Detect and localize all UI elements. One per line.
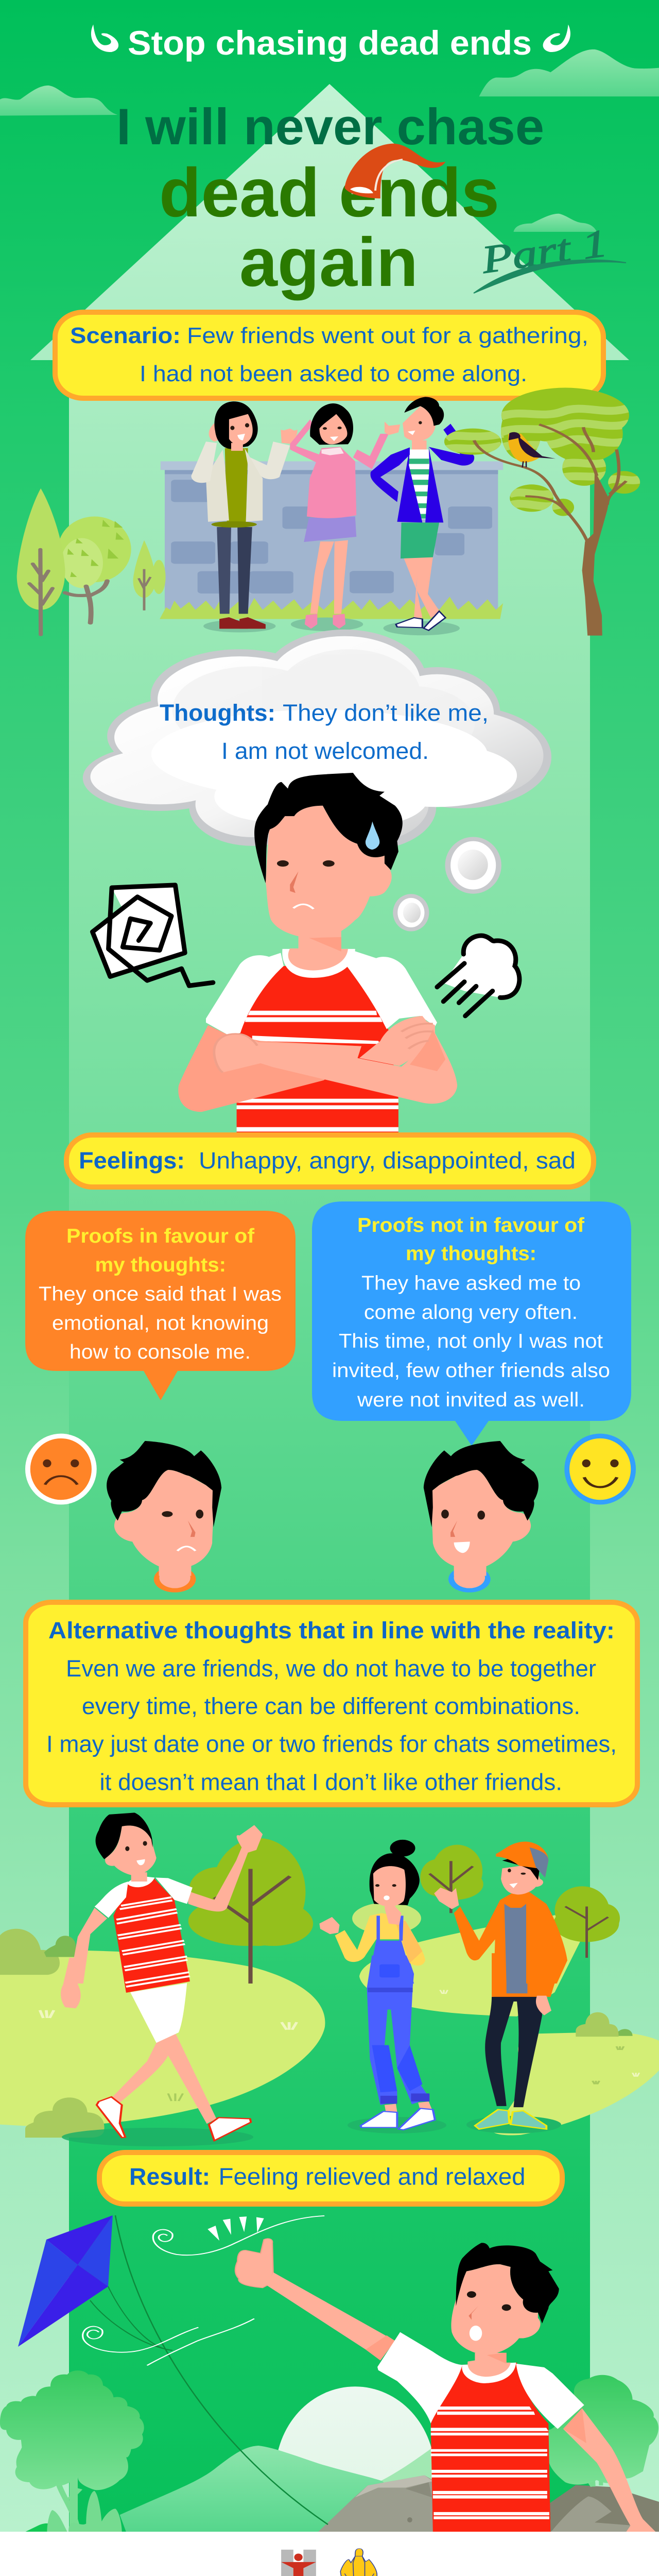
part label [474,222,626,293]
illustration: happy boy with thumb up [235,2239,655,2532]
panel: scenario: Few friends went out for a gathering, [187,323,588,348]
icon: red arrow over the word ends [344,144,445,198]
panel: proofs in favour: emotional, not knowing [52,1312,269,1334]
mountains behind title [0,49,659,232]
hand: thumbs up [235,2239,273,2288]
illustration: girl in pink [281,403,400,631]
icon: bird [508,432,556,467]
illustration: trees on left [17,488,166,635]
title: dead ends [159,155,499,231]
panel: proofs not in favour: invited, few other friends also [332,1360,610,1382]
head [451,2264,541,2355]
illustration: thought cloud [83,630,551,851]
sleeves [206,953,284,1035]
panel: result: Feeling relieved and relaxed [218,2163,525,2190]
part label: Part 1 [478,222,610,282]
illustration: bottom landscape [0,2370,659,2561]
title [116,98,544,301]
panel: result: Result: [129,2163,210,2190]
title: again [239,224,418,301]
icon: sad face [25,1434,97,1504]
collar and neck [462,2363,516,2383]
icon: right swirl [543,24,570,52]
illustration: girl with cardigan [191,401,298,633]
panel: alternative thoughts [26,1602,637,1805]
panel: proofs in favour [25,1211,296,1400]
crossed arms [178,1025,361,1112]
illustration: upset boy [178,773,457,1132]
illustration: woman in overalls [319,1840,446,2133]
illustration: bushes [0,1929,633,2138]
illustration: sad boy head [107,1441,221,1592]
panel: scenario: Scenario: [70,323,181,348]
right rock [548,2485,659,2532]
heading text: Stop chasing dead ends [128,24,532,62]
panel: proofs in favour: my thoughts: [95,1254,226,1276]
thoughts text: Thoughts: [160,700,275,726]
top heading [91,24,570,62]
thoughts text: I am not welcomed. [221,738,429,764]
icon: scribble [93,885,213,986]
upper body [70,1812,263,1993]
panel: feelings [66,1135,594,1187]
left tree [0,2370,144,2532]
illustration: kite [18,2215,328,2524]
right tree [548,2375,658,2486]
left rock [318,2475,433,2532]
legs and shoes [61,1958,251,2141]
icon: left swirl [91,24,118,52]
panel: alternative thoughts: I may just date one or two friends for chats sometimes, [46,1731,617,1757]
illustration: man with orange cap [434,1841,567,2133]
shirt torso [237,966,398,1132]
shirt [431,2363,550,2532]
icon: wind lines [83,2216,324,2365]
panel: proofs not in favour: my thoughts: [406,1243,536,1265]
panel: proofs in favour: They once said that I was [39,1283,282,1306]
illustration: boy in blue blazer [371,397,474,635]
panel: alternative thoughts: it doesn’t mean that I don’t like other friends. [100,1769,562,1795]
panel: proofs not in favour: Proofs not in favour of [357,1214,585,1236]
panel: feelings: Feelings: [79,1147,185,1174]
footer [0,2532,659,2576]
illustration: wall [160,461,503,619]
ground shadow [62,2128,253,2146]
icon: steam puff [437,936,519,1016]
panel: feelings: Unhappy, angry, disappointed, sad [199,1147,576,1174]
panel: proofs not in favour: were not invited as well. [357,1389,585,1411]
illustration: walking man [61,1812,263,2146]
raised arm [267,2273,395,2361]
icon: happy face [564,1434,636,1504]
panel: scenario: I had not been asked to come along. [140,361,527,386]
thoughts text: They don’t like me, [283,700,489,726]
logo: hands holding figure [340,2549,377,2576]
panel: proofs in favour: how to console me. [70,1341,251,1363]
neck and collar [282,949,355,978]
other arm [563,2408,655,2532]
illustration: tree with bird [441,386,643,636]
panel: alternative thoughts: Even we are friends, we do not have to be together [66,1655,596,1682]
illustration: lawn [0,1908,659,2136]
panel: proofs not in favour: They have asked me to [361,1273,581,1294]
icon: thought bubbles [393,837,501,931]
panel: proofs not in favour: come along very often. [364,1301,578,1324]
sleeves [377,2332,462,2424]
panel: alternative thoughts: Alternative thoughts that in line with the reality: [48,1617,615,1643]
panel: proofs not in favour: This time, not only I was not [339,1330,603,1352]
panel: alternative thoughts: every time, there can be different combinations. [82,1693,580,1719]
panel: proofs in favour: Proofs in favour of [66,1225,255,1247]
title: I will never chase [116,98,544,155]
panel: scenario [55,312,603,398]
illustration: trees in park [188,1838,620,1984]
panel: proofs not in favour [312,1201,631,1446]
logo: health department [281,2550,316,2576]
hair [254,773,403,883]
illustration: happy boy head [424,1441,539,1592]
head [266,806,392,938]
sweat drop [366,821,379,850]
thoughts text [160,700,489,764]
panel: result [99,2153,562,2204]
